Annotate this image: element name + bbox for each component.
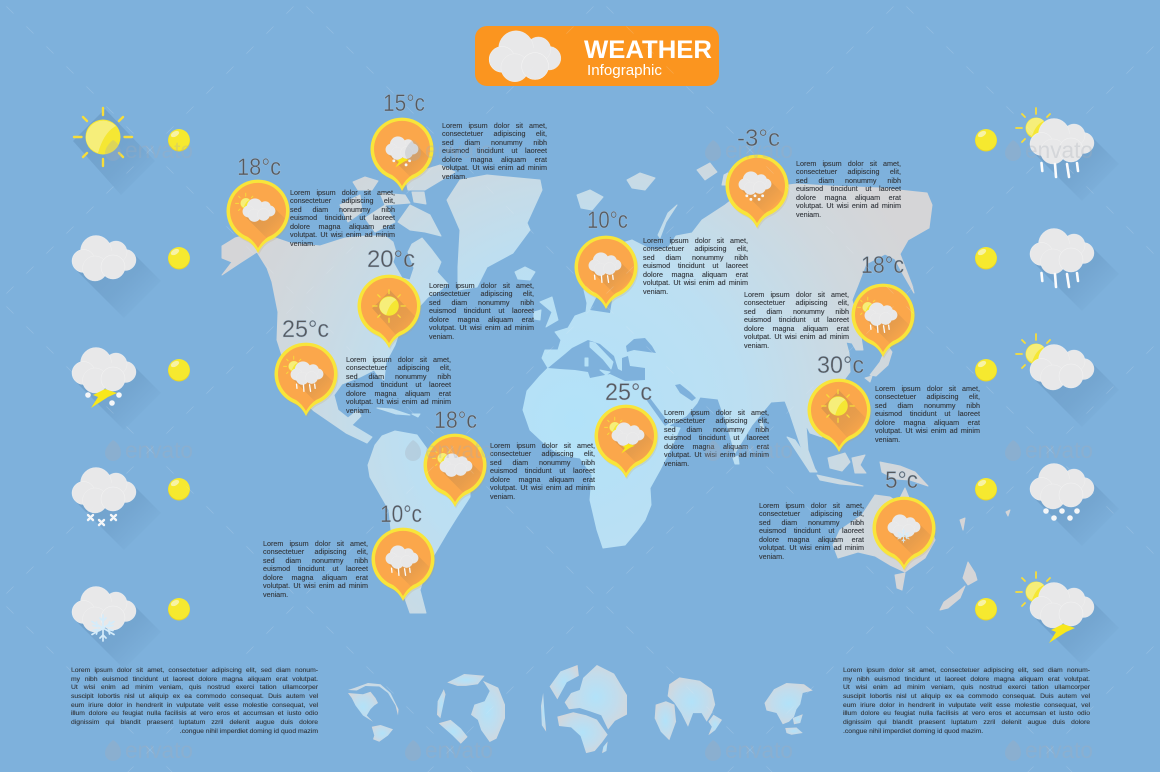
- text block: 25 degrees mexico: consectetuer adipiscing elit,: [346, 363, 451, 372]
- pin: 25 degrees africa: [594, 405, 658, 480]
- text block: 18 degrees south america: Lorem ipsum dolor sit amet,: [490, 440, 595, 450]
- header subtitle: Infographic: [587, 63, 662, 79]
- text block: 20 degrees: dolore magna aliquam erat: [429, 315, 534, 324]
- text block: 10 degrees south america: sed diam nonummy nibh: [263, 556, 368, 565]
- pin: 18 degrees sun cloud: [226, 180, 290, 254]
- text block: 5 degrees: [759, 500, 864, 561]
- bottom left text block: eum iriure dolor in hendrerit in vulputate velit esse molestie consequat, vel: [71, 702, 318, 709]
- globe: atlantic: [437, 674, 505, 744]
- bottom right text block: .congue nihil imperdiet doming id quod mazim.: [843, 728, 983, 735]
- text block: 18 degrees south america: euismod tincidunt ut laoreet: [490, 466, 595, 475]
- bottom left text block: my nibh euismod tincidunt ut laoreet dolore magna aliquam erat volutpat.: [71, 676, 318, 683]
- text block: 18 degrees japan: Lorem ipsum dolor sit amet,: [744, 290, 849, 298]
- text block: 18 degrees south america: [490, 440, 595, 501]
- bottom left text block: suscipit lobortis nisl ut aliquip ex ea commodo consequat. Duis autem vel: [71, 693, 318, 700]
- south america: [368, 431, 470, 613]
- text block: 20 degrees: Lorem ipsum dolor sit amet,: [429, 280, 534, 290]
- text block: 10 degrees europe: dolore magna aliquam erat: [643, 270, 748, 279]
- tasmania and new zealand: [895, 510, 1010, 610]
- text block: 10 degrees south america: [263, 538, 368, 599]
- text block: 15 degrees: [442, 120, 547, 181]
- text block: 10 degrees europe: Lorem ipsum dolor sit amet,: [643, 236, 748, 244]
- text block: 10 degrees europe: consectetuer adipiscing elit,: [643, 244, 748, 253]
- pin: 30 degrees sun: [808, 379, 872, 454]
- temperature labels: 30°c: [817, 352, 864, 379]
- japan: [865, 345, 892, 382]
- bottom left text block: Lorem ipsum dolor sit amet, consectetuer adipiscing elit, sed diam nonum-: [71, 667, 318, 674]
- legend icon: sun with rain: [1016, 108, 1119, 201]
- pin: 10 degrees south america: [372, 528, 436, 602]
- legend icon: snow dots: [1030, 464, 1119, 546]
- text block: 5 degrees: volutpat. Ut wisi enim ad minim: [759, 543, 864, 552]
- cuba and caribbean: [377, 408, 420, 417]
- text block: 30 degrees: Lorem ipsum dolor sit amet,: [875, 384, 980, 392]
- text block: 10 degrees europe: volutpat. Ut wisi enim ad minim: [643, 278, 748, 287]
- text block: 10 degrees europe: sed diam nonummy nibh: [643, 253, 748, 262]
- text block: 5 degrees: sed diam nonummy nibh: [759, 518, 864, 527]
- legend icon: rain: [1030, 228, 1119, 311]
- legend icon: sun with lightning: [1016, 572, 1119, 665]
- european and asian islands: [534, 163, 764, 464]
- text block: 25 degrees mexico: sed diam nonummy nibh: [346, 372, 451, 381]
- text block: 18 degrees alaska: [290, 188, 395, 248]
- pin: 10 degrees europe: [574, 236, 638, 310]
- text block: 25 degrees mexico: Lorem ipsum dolor sit amet,: [346, 354, 451, 364]
- text block: 5 degrees: consectetuer adipiscing elit,: [759, 509, 864, 518]
- text block: 18 degrees japan: euismod tincidunt ut laoreet: [744, 315, 849, 324]
- text block: 5 degrees: veniam.: [759, 552, 784, 561]
- pin: 20 degrees sun: [358, 275, 422, 350]
- text block: 25 degrees mexico: dolore magna aliquam erat: [346, 389, 451, 398]
- text block: 18 degrees japan: veniam.: [744, 341, 769, 350]
- pin: 18 degrees japan: [852, 284, 916, 358]
- globe: americas: [348, 683, 398, 742]
- bottom right text block: Lorem ipsum dolor sit amet, consectetuer adipiscing elit, sed diam nonum-: [843, 667, 1090, 674]
- text block: 18 degrees south america: consectetuer adipiscing elit,: [490, 449, 595, 458]
- text block: 20 degrees: consectetuer adipiscing elit,: [429, 289, 534, 298]
- text block: 18 degrees south america: veniam.: [490, 492, 515, 501]
- envato watermarks: [105, 137, 1093, 763]
- header banner: [475, 26, 719, 86]
- temperature labels: 5°c: [885, 467, 918, 494]
- bottom left text block: illum dolore eu feugiat nulla facilisis at vero eros et accumsan et iusto odio: [71, 710, 318, 717]
- text block: 10 degrees europe: euismod tincidunt ut laoreet: [643, 261, 748, 270]
- bottom right text block: my nibh euismod tincidunt ut laoreet dolore magna aliquam erat volutpat.: [843, 676, 1090, 683]
- temperature labels: -3°c: [737, 125, 780, 152]
- header title: WEATHER: [584, 36, 712, 64]
- text block: 25 degrees mexico: volutpat. Ut wisi enim ad minim: [346, 397, 451, 406]
- text block: 25 degrees africa: veniam.: [664, 459, 689, 468]
- text block: minus 3 degrees: dolore magna aliquam erat: [796, 193, 901, 202]
- text block: 25 degrees africa: consectetuer adipiscing elit,: [664, 416, 769, 425]
- text block: 10 degrees europe: [643, 236, 748, 296]
- text block: 20 degrees: euismod tincidunt ut laoreet: [429, 306, 534, 315]
- text block: 20 degrees: volutpat. Ut wisi enim ad minim: [429, 323, 534, 332]
- bottom right text block: dignissim qui blandit praesent luptatum zzril delenit augue duis dolore: [843, 719, 1090, 726]
- pin: 5 degrees australia: [872, 497, 936, 572]
- text block: 20 degrees: [429, 280, 534, 341]
- text block: 18 degrees south america: dolore magna aliquam erat: [490, 475, 595, 484]
- pin: 18 degrees south america: [424, 434, 488, 508]
- text block: 10 degrees south america: dolore magna aliquam erat: [263, 573, 368, 582]
- bottom right text block: [843, 667, 1090, 735]
- pin: 25 degrees sun rain: [274, 343, 338, 418]
- text block: minus 3 degrees: volutpat. Ut wisi enim ad minim: [796, 201, 901, 210]
- north america: [222, 232, 448, 443]
- iceland: [515, 267, 535, 280]
- globe: africa and europe: [541, 665, 627, 753]
- south east asia and new guinea: [787, 437, 928, 486]
- text block: 10 degrees europe: veniam.: [643, 287, 668, 296]
- legend icon: sun behind cloud: [1016, 334, 1119, 427]
- bottom right text block: illum dolore eu feugiat nulla facilisis at vero eros et accumsan et iusto odio: [843, 710, 1090, 717]
- text block: 30 degrees: veniam.: [875, 435, 900, 444]
- text block: 5 degrees: euismod tincidunt ut laoreet: [759, 526, 864, 535]
- legend icon: snow crosses: [72, 468, 161, 550]
- text block: 15 degrees: sed diam nonummy nibh: [442, 138, 547, 147]
- bottom left text block: Ut wisi enim ad minim veniam, quis nostrud exerci tation ullamcorper: [71, 684, 318, 691]
- text block: 20 degrees: sed diam nonummy nibh: [429, 298, 534, 307]
- text block: 25 degrees africa: volutpat. Ut wisi enim ad minim: [664, 450, 769, 459]
- bottom row of globes: [348, 665, 813, 753]
- text block: 10 degrees south america: euismod tincidunt ut laoreet: [263, 564, 368, 573]
- text block: 18 degrees japan: [744, 290, 849, 350]
- temperature labels: [237, 90, 918, 528]
- text block: 10 degrees south america: veniam.: [263, 590, 288, 599]
- temperature labels: 10°c: [587, 207, 628, 234]
- temperature labels: 20°c: [367, 246, 415, 273]
- text block: 25 degrees africa: [664, 408, 769, 468]
- text block: 18 degrees alaska: Lorem ipsum dolor sit amet,: [290, 188, 395, 196]
- temperature labels: 15°c: [383, 90, 425, 117]
- text block: 15 degrees: dolore magna aliquam erat: [442, 155, 547, 164]
- left yellow bullets: [168, 129, 190, 620]
- text block: minus 3 degrees: Lorem ipsum dolor sit amet,: [796, 158, 901, 168]
- australia: [833, 488, 935, 572]
- text block: 18 degrees alaska: veniam.: [290, 239, 315, 248]
- temperature labels: 10°c: [380, 501, 422, 528]
- text block: 30 degrees: [875, 384, 980, 444]
- temperature labels: 18°c: [434, 407, 477, 434]
- eurasia and africa: [523, 184, 932, 548]
- bottom left text block: .congue nihil imperdiet doming id quod mazim: [180, 728, 318, 735]
- text block: 10 degrees south america: Lorem ipsum dolor sit amet,: [263, 538, 368, 548]
- pin: minus 3 degrees: [726, 155, 790, 230]
- text block: 30 degrees: euismod tincidunt ut laoreet: [875, 409, 980, 418]
- text block: minus 3 degrees: euismod tincidunt ut laoreet: [796, 184, 901, 193]
- text block: 18 degrees japan: consectetuer adipiscing elit,: [744, 298, 849, 307]
- text block: 18 degrees alaska: sed diam nonummy nibh: [290, 205, 395, 214]
- temperature labels: 18°c: [861, 252, 904, 279]
- text block: 15 degrees: volutpat. Ut wisi enim ad minim: [442, 163, 547, 172]
- globe: east asia: [764, 683, 813, 735]
- text block: 30 degrees: dolore magna aliquam erat: [875, 418, 980, 427]
- bottom right text block: Ut wisi enim ad minim veniam, quis nostrud exerci tation ullamcorper: [843, 684, 1090, 691]
- text block: 18 degrees alaska: dolore magna aliquam erat: [290, 222, 395, 231]
- text block: 5 degrees: dolore magna aliquam erat: [759, 535, 864, 544]
- text block: 15 degrees: veniam.: [442, 172, 467, 181]
- bottom left text block: dignissim qui blandit praesent luptatum zzril delenit augue duis dolore: [71, 719, 318, 726]
- temperature labels: 25°c: [605, 379, 652, 406]
- text block: 18 degrees south america: sed diam nonummy nibh: [490, 458, 595, 467]
- text block: 18 degrees alaska: euismod tincidunt ut laoreet: [290, 213, 395, 222]
- text block: 18 degrees alaska: volutpat. Ut wisi enim ad minim: [290, 230, 395, 239]
- text block: 18 degrees japan: sed diam nonummy nibh: [744, 307, 849, 316]
- legend icon: storm cloud: [72, 348, 161, 430]
- text block: 30 degrees: consectetuer adipiscing elit,: [875, 392, 980, 401]
- text block: 25 degrees mexico: veniam.: [346, 406, 371, 415]
- temperature labels: 18°c: [237, 154, 281, 181]
- text block: 18 degrees south america: volutpat. Ut wisi enim ad minim: [490, 483, 595, 492]
- text block: 25 degrees mexico: euismod tincidunt ut laoreet: [346, 380, 451, 389]
- legend icon: sun: [73, 108, 155, 195]
- text block: 18 degrees alaska: consectetuer adipiscing elit,: [290, 196, 395, 205]
- text block: minus 3 degrees: veniam.: [796, 210, 821, 219]
- text block: 10 degrees south america: consectetuer adipiscing elit,: [263, 547, 368, 556]
- bottom right text block: suscipit lobortis nisl ut aliquip ex ea commodo consequat. Duis autem vel: [843, 693, 1090, 700]
- bottom left text block: [71, 667, 318, 735]
- text block: 25 degrees africa: sed diam nonummy nibh: [664, 425, 769, 434]
- text block: minus 3 degrees: sed diam nonummy nibh: [796, 176, 901, 185]
- text block: 25 degrees mexico: [346, 354, 451, 415]
- world map: [222, 163, 1010, 613]
- globe: asia: [655, 677, 722, 740]
- text block: 25 degrees africa: euismod tincidunt ut laoreet: [664, 433, 769, 442]
- text block: 10 degrees south america: volutpat. Ut wisi enim ad minim: [263, 581, 368, 590]
- text block: 20 degrees: veniam.: [429, 332, 454, 341]
- temperature labels: 25°c: [282, 316, 329, 343]
- greenland: [447, 175, 542, 290]
- text block: 18 degrees japan: volutpat. Ut wisi enim ad minim: [744, 332, 849, 341]
- legend icon: snowflake: [72, 586, 161, 669]
- inland seas: [548, 292, 696, 426]
- text block: 25 degrees africa: Lorem ipsum dolor sit amet,: [664, 408, 769, 416]
- pin: 15 degrees storm: [370, 118, 434, 192]
- text block: 15 degrees: consectetuer adipiscing elit,: [442, 129, 547, 138]
- header cloud icon: [489, 31, 561, 82]
- text block: 30 degrees: volutpat. Ut wisi enim ad minim: [875, 426, 980, 435]
- text block: 15 degrees: Lorem ipsum dolor sit amet,: [442, 120, 547, 130]
- text block: 25 degrees africa: dolore magna aliquam erat: [664, 442, 769, 451]
- text block: 18 degrees japan: dolore magna aliquam erat: [744, 324, 849, 333]
- text block: minus 3 degrees: [796, 158, 901, 219]
- canadian arctic islands: [340, 165, 455, 236]
- text block: 30 degrees: sed diam nonummy nibh: [875, 401, 980, 410]
- right yellow bullets: [975, 129, 997, 620]
- legend icon: cloud: [72, 236, 161, 318]
- bottom right text block: eum iriure dolor in hendrerit in vulputate velit esse molestie consequat, vel: [843, 702, 1090, 709]
- text block: 15 degrees: euismod tincidunt ut laoreet: [442, 146, 547, 155]
- text block: 5 degrees: Lorem ipsum dolor sit amet,: [759, 500, 864, 510]
- text block: minus 3 degrees: consectetuer adipiscing elit,: [796, 167, 901, 176]
